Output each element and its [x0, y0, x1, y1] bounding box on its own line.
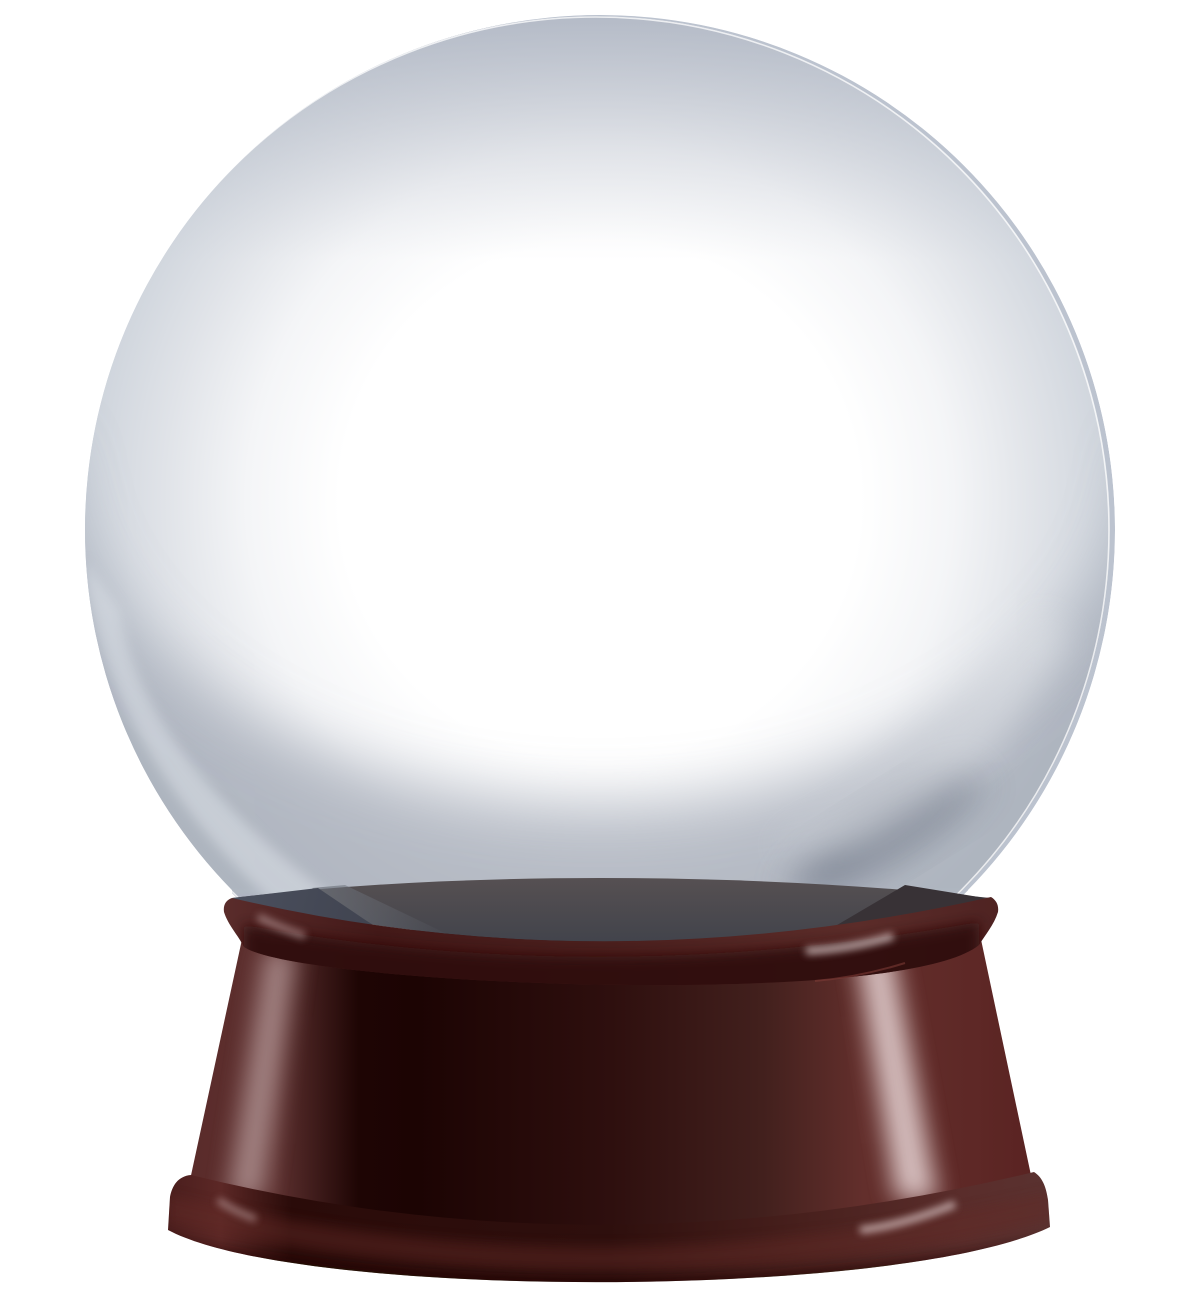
sphere radial glow	[80, 10, 1120, 910]
glass floor inside the globe	[232, 878, 991, 945]
outer rim	[85, 15, 1115, 894]
top shading	[243, 16, 950, 216]
wooden base: top collar	[224, 897, 998, 985]
wooden base: bottom flange	[168, 1172, 1050, 1282]
lower right dark band	[782, 762, 988, 888]
collar: lower red lip highlight	[815, 963, 905, 981]
sphere interior	[85, 16, 1110, 898]
glass sphere	[85, 15, 1115, 898]
floor: left blue shadow	[232, 888, 392, 938]
lower shade	[85, 485, 1110, 898]
lower right light crescent	[802, 634, 1066, 864]
left lens between shell and inner sphere	[87, 573, 322, 894]
floor: right dark shadow	[815, 885, 985, 938]
wooden base: lower body	[190, 930, 1032, 1240]
inner edge highlight	[217, 16, 1110, 898]
floor: lens band	[312, 885, 470, 945]
